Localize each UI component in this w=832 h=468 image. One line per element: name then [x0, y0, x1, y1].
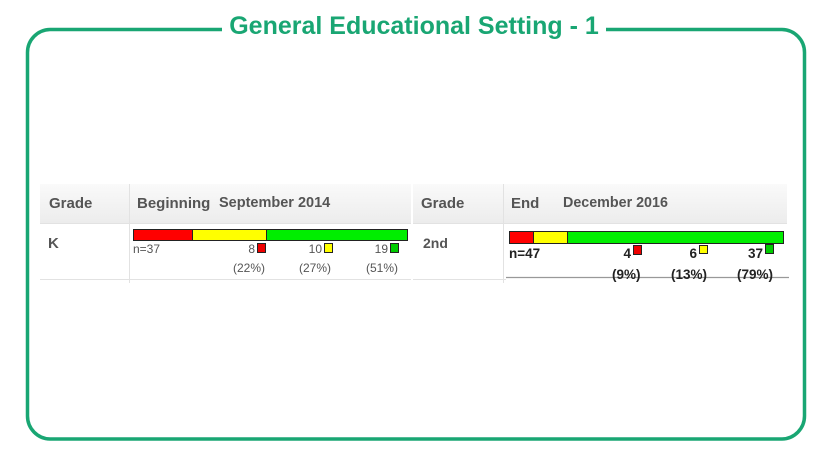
row label: 2nd: 2nd [423, 235, 448, 251]
header background [40, 184, 411, 223]
panel: end table [413, 193, 787, 223]
value: 10 yellow: 10 [309, 242, 322, 256]
heading: grade left: Grade [49, 195, 92, 212]
panel: beginning table [40, 193, 411, 223]
value: 8 red: 8 [248, 242, 255, 256]
heading: beginning: Beginning [137, 195, 210, 212]
value: 6 yellow [689, 245, 708, 261]
text: n=47: n=47 [509, 246, 540, 261]
value: 4 red: 4 [623, 246, 631, 261]
header background right [413, 184, 787, 223]
value: 6 yellow: 6 [689, 246, 697, 261]
row label: K: K [48, 235, 59, 252]
value: 37 green [748, 244, 774, 261]
percent: 51%: (51%) [366, 261, 398, 275]
heading: september 2014: September 2014 [219, 195, 330, 211]
text: n=37: n=37 [133, 242, 160, 256]
value: 19 green [375, 242, 399, 256]
heading: end: End [511, 195, 539, 212]
heading: december 2016: December 2016 [563, 195, 668, 211]
percent: 9%: (9%) [612, 267, 641, 282]
stacked bar: beginning [133, 229, 408, 241]
percent: 22%: (22%) [233, 261, 265, 275]
value: 37 green: 37 [748, 246, 763, 261]
heading: grade right: Grade [421, 195, 464, 212]
value: 19 green: 19 [375, 242, 388, 256]
percent: 13%: (13%) [671, 267, 707, 282]
value: 8 red [248, 242, 266, 256]
percent: 79%: (79%) [737, 267, 773, 282]
value: 10 yellow [309, 242, 333, 256]
stacked bar: end [509, 231, 784, 244]
value: 4 red [623, 245, 642, 261]
percent: 27%: (27%) [299, 261, 331, 275]
title: General Educational Setting - 1 [229, 12, 599, 40]
